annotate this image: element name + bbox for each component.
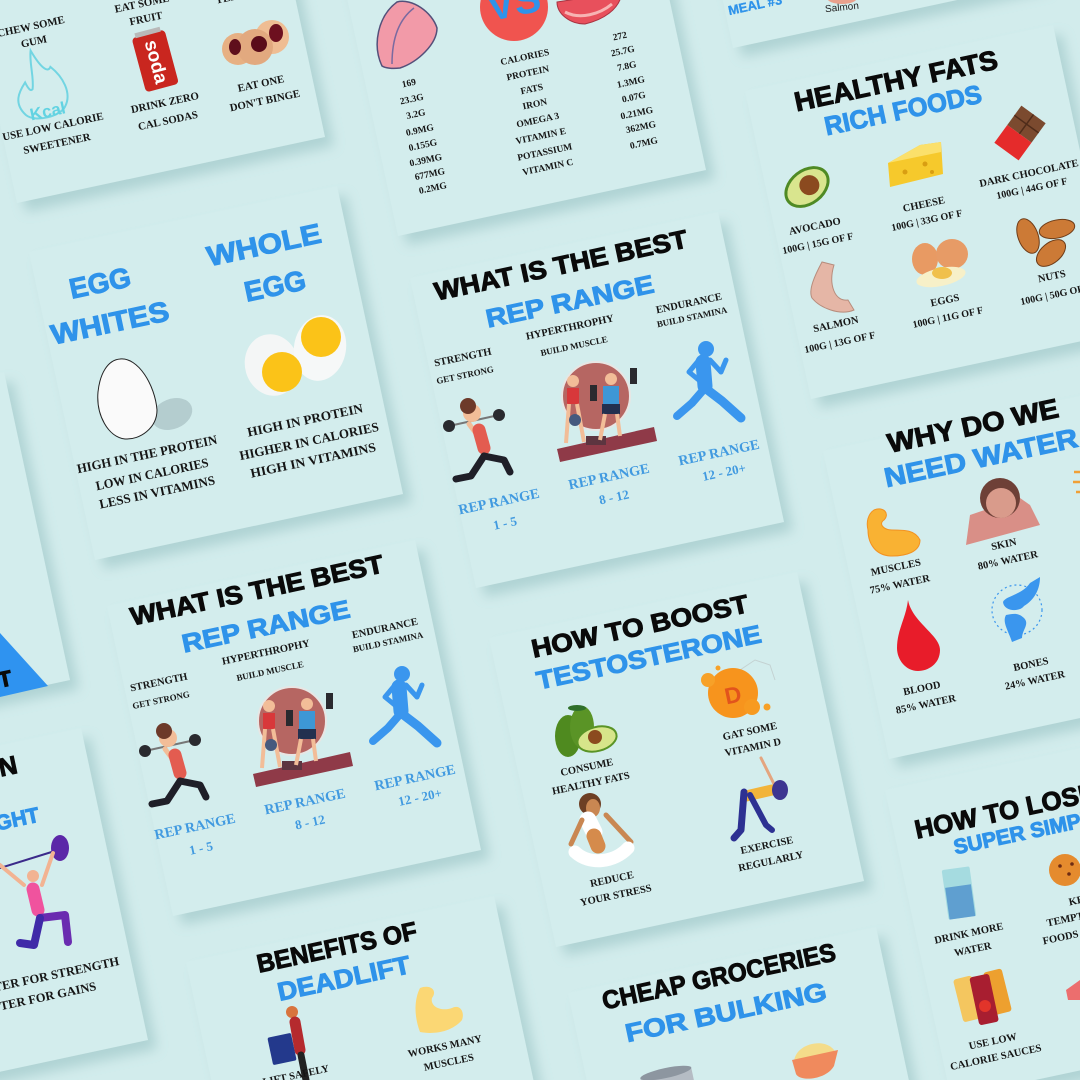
label: drink water: DRINK MORE [933,921,1005,947]
icon: bone joint [992,577,1042,642]
heading: egg whites: EGG [66,261,134,305]
beef values [610,31,659,152]
label: nuts [1019,269,1080,308]
beef values: 0.7MG [629,136,659,152]
subheading: REP RANGE [179,596,353,658]
icon: sun rays [1073,472,1080,492]
label: strength: GET STRONG [435,364,495,386]
nutrient names: POTASSIUM [517,142,573,164]
icon: face washing [966,478,1040,545]
icon: boiled eggs [238,311,351,402]
label: avocado [781,216,855,257]
label: eggs: 100G | 11G OF F [912,305,984,331]
label: vitamin D [722,721,783,759]
icon: pyramid [0,633,48,697]
label: dark chocolate: DARK CHOCOLATE [978,158,1080,190]
nutrient names: VITAMIN E [515,127,567,147]
rep range 1-5: 1 - 5 [492,513,519,533]
icon: white egg [98,359,197,439]
icon: cookies [222,20,289,65]
label: eggs: EGGS [930,293,961,309]
subheading: REP RANGE [483,271,657,333]
rep range 12-20+: REP RANGE [677,437,761,469]
beef values: 1.3MG [616,75,646,91]
rep range 8-12 [263,786,347,832]
label: drink water [933,921,1005,959]
rep range 1-5: 1 - 5 [188,838,215,858]
heading: WHY DO WE [885,393,1061,459]
label: avocado: AVOCADO [788,216,842,238]
label: muscles: 75% WATER [869,573,931,597]
chicken values: 23.3G [399,92,425,107]
label: strength [129,672,191,711]
tip: zero sodas: DRINK ZERO [130,90,200,116]
label: endurance: BUILD STAMINA [352,630,425,654]
label: strength: STRENGTH [129,672,189,694]
panel: how to lose [885,724,1080,1080]
tip: chew gum: GUM [20,33,48,51]
rep range 1-5 [153,811,237,858]
icon: pasta bowl [792,1043,838,1079]
label: skin: 80% WATER [977,549,1039,573]
label: skin [977,537,1039,573]
label: strength [433,347,495,386]
chicken values: 3.2G [406,108,427,122]
label: reduce stress: REDUCE [589,870,635,890]
panel: why water [823,385,1080,759]
label: reduce stress [579,870,653,909]
label: hypertrophy [525,313,615,358]
panel: strength vs gains [0,728,148,1080]
icon: overhead lifter [0,835,69,945]
label: exercise: EXERCISE [740,835,794,857]
rep range 8-12: 8 - 12 [294,812,326,832]
heading: WHAT IS THE BEST [128,550,387,632]
chicken values: 169 [401,78,417,90]
heading: HOW TO BOOST [529,590,751,664]
heading: egg whites: WHITES [48,295,172,351]
heading: CHEAP GROCERIES [600,939,838,1015]
label: sauces: CALORIE SAUCES [949,1043,1043,1073]
icon: kcal flame [8,45,72,126]
label: salmon [803,315,877,356]
label: blood [895,680,957,717]
heading: whole egg: EGG [241,264,309,308]
panel: healthy fats [745,25,1080,399]
beef values: 272 [612,31,628,43]
label: cheese: 100G | 33G OF F [890,208,964,234]
icon: cheese [888,142,943,187]
label: exercise [738,835,805,874]
icon: lunging woman with barbell [443,398,510,479]
icon: eggs [912,239,968,291]
icon: sauce bottles [953,968,1012,1026]
icon: soda can [131,26,179,92]
egg whites facts: LESS IN VITAMINS [98,472,216,512]
label: salmon: SALMON [812,315,860,335]
label: nuts: NUTS [1037,269,1067,285]
label: hypertrophy: BUILD MUSCLE [540,334,609,358]
label: blood: BLOOD [902,680,942,698]
tip: no binge: EAT ONE [237,73,285,95]
nutrient names: IRON [522,98,548,112]
rep range 8-12: 8 - 12 [598,487,630,507]
label: works many muscles: WORKS MANY [407,1034,483,1060]
icon: salmon dish [827,0,857,4]
icon: vitamin D3 [701,660,775,718]
label: endurance: BUILD STAMINA [656,305,729,329]
label: bones: 24% WATER [1004,669,1066,693]
rep range 1-5: REP RANGE [153,811,237,843]
label: sauces: USE LOW [968,1031,1018,1052]
beef values: 362MG [625,120,658,136]
meal item: Salmon [825,1,859,15]
label: strength: GET STRONG [131,689,191,711]
chicken values: 0.39MG [409,153,444,169]
beef values: 0.07G [621,90,647,105]
label: muscles [869,557,931,597]
icon: meditating woman [571,793,631,861]
beef values: 25.7G [610,44,636,59]
label: muscles: MUSCLES [870,557,922,579]
nutrient names: FATS [520,83,544,97]
heading: BENEFITS OF [254,917,420,979]
beef values: 0.21MG [620,106,655,122]
rep range 12-20+: 12 - 20+ [701,460,747,484]
heading: whole egg [204,218,324,308]
rep range 12-20+: 12 - 20+ [397,785,443,809]
rep range 1-5: REP RANGE [457,486,541,518]
whole egg facts: HIGH IN PROTEIN [246,400,365,440]
heading: HEALTHY FATS [792,45,1000,117]
icon: avocado [776,157,838,217]
label: drink water: WATER [953,941,993,959]
rep range 1-5 [457,486,541,533]
rep range 8-12: REP RANGE [263,786,347,818]
panel: benefits of deadlift [186,896,560,1080]
whole egg facts [238,400,380,481]
chicken values: 0.2MG [418,181,448,197]
chicken values [399,78,448,197]
panel: low calorie tips [0,0,325,203]
label: salmon: 100G | 13G OF F [803,330,877,356]
tip: no binge: DON'T BINGE [229,88,301,114]
label: avocado: 100G | 15G OF F [781,231,855,257]
heading: WHAT IS THE BEST [432,225,691,307]
whole egg facts: HIGH IN VITAMINS [249,439,377,481]
panel: cheap groceries [568,927,942,1080]
rep range 12-20+ [373,762,457,809]
subheading: FOR BULKING [623,978,829,1048]
subheading: TESTOSTERONE [534,621,764,695]
icon: glass of water [942,866,976,920]
label: dark chocolate: 100G | 44G OF F [995,176,1069,202]
panel: chicken vs beef [332,0,706,236]
rep range 8-12 [567,461,651,507]
tip: sweetener: SWEETENER [22,131,92,157]
egg whites facts: HIGH IN THE PROTEIN [76,432,219,476]
icon: soda can: soda [140,38,172,86]
chicken values: 0.9MG [405,123,435,139]
egg whites facts [76,432,219,512]
icon: gym machine scene [253,687,353,787]
label: healthy fats: CONSUME [560,757,614,779]
icon: avocados [555,705,619,757]
tip: zero sodas: CAL SODAS [137,109,199,133]
panel: rep range (lower) [107,540,481,916]
tip: no binge [229,73,301,114]
panel: egg whites vs whole egg [29,186,403,560]
panel: meal plan [667,0,1041,48]
icon: VS badge [480,0,548,41]
icon: stretching figure [734,758,788,838]
icon: dark chocolate [994,106,1046,160]
chicken values: 677MG [414,167,447,183]
rep range 8-12: REP RANGE [567,461,651,493]
label: hypertrophy: HYPERTHROPHY [525,313,615,343]
subheading: RICH FOODS [822,79,984,141]
nutrient names [500,48,575,178]
icon: blue runner [677,341,741,418]
label: vitamin D: VITAMIN D [724,737,783,759]
label: works many muscles [407,1034,483,1074]
icon: gym machine scene [557,362,657,462]
heading: whole egg: WHOLE [204,218,324,272]
label: hypertrophy: BUILD MUSCLE [236,659,305,683]
label: eggs [912,293,984,331]
icon: person lifting bag [267,1006,306,1080]
label: vitamin D: GAT SOME [722,721,778,743]
icon: chicken breast [377,1,437,68]
panel: rep range (upper) [410,212,784,588]
label: blood: 85% WATER [895,693,957,717]
nutrient names: OMEGA 3 [516,112,561,130]
label: skin: SKIN [990,537,1018,553]
icon: blood drop [897,600,940,671]
label: hypertrophy: HYPERTHROPHY [221,638,311,668]
label: endurance [655,292,729,329]
label: cheese [890,195,964,234]
label: tempting foods [1042,892,1080,947]
label: healthy fats [551,757,631,798]
egg whites facts: LOW IN CALORIES [94,455,210,493]
tip: fruit: FRUIT [128,9,164,28]
icon: flexed arm [416,987,463,1033]
label: cheese: CHEESE [902,195,946,215]
icon: steak [1066,980,1080,1000]
label: endurance: ENDURANCE [351,617,419,641]
nutrient names: CALORIES [500,48,550,68]
panel: boost testosterone [489,572,864,947]
label: endurance [351,617,425,654]
icon: salmon fish [811,262,854,312]
nutrient names: PROTEIN [506,65,550,83]
icon: blue runner [373,666,437,743]
chicken values: 0.155G [408,138,439,154]
whole egg facts: HIGHER IN CALORIES [238,419,380,463]
icon: cookie [1049,854,1080,886]
label: works many muscles: MUSCLES [423,1052,475,1074]
rep range 12-20+ [677,437,761,484]
subheading: NEED WATER [882,423,1080,493]
beef values: 7.8G [617,60,638,74]
icon: kcal flame: Kcal [28,98,67,124]
label: healthy fats: HEALTHY FATS [551,770,631,798]
icon: flexed muscle [867,509,920,556]
icon: beef steak [557,0,622,24]
icon: lunging woman with barbell [139,723,206,804]
icon: nuts [1012,216,1076,272]
label: reduce stress: YOUR STRESS [579,883,653,909]
icon: tin can [639,1063,695,1080]
heading: egg whites [48,261,172,351]
panel: pyramid card [0,372,70,746]
nutrient names: VITAMIN C [522,158,575,178]
subheading: DEADLIFT [275,951,413,1007]
label: bones: BONES [1012,656,1050,674]
label: endurance: ENDURANCE [655,292,723,316]
label: exercise: REGULARLY [738,850,805,874]
label: strength: STRENGTH [433,347,493,369]
rep range 12-20+: REP RANGE [373,762,457,794]
label: bones [1004,656,1066,693]
label: hypertrophy [221,638,311,683]
icon: vitamin D3: D [722,681,744,709]
tip: sweetener: USE LOW CALORIE [1,110,105,144]
tip: zero sodas [130,90,200,133]
tip: fruit [114,0,170,28]
